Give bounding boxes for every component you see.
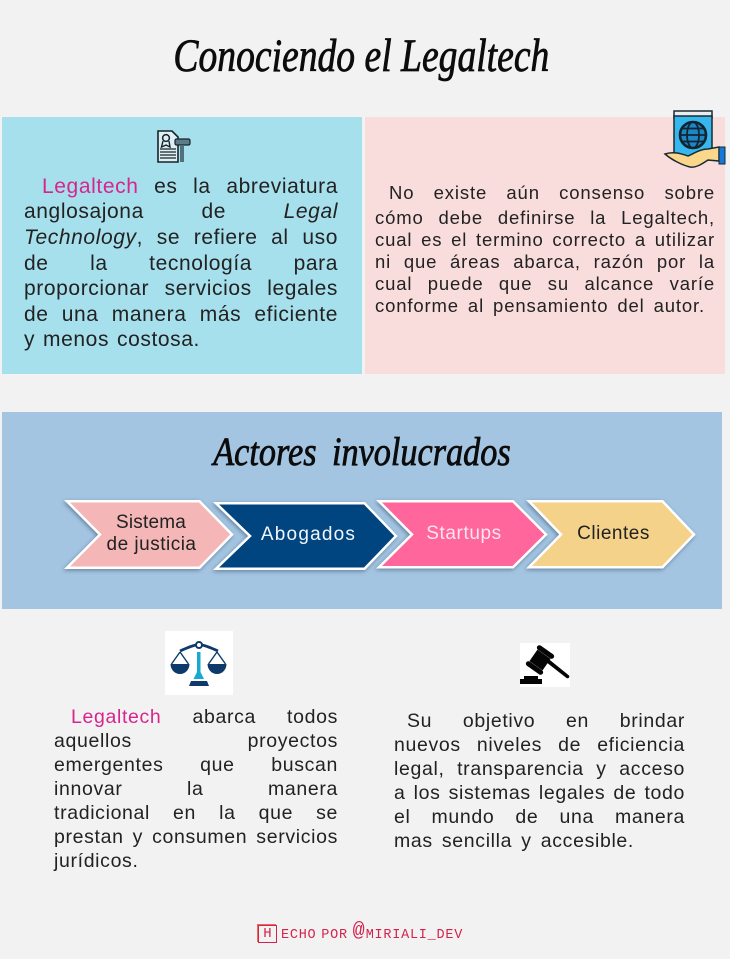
text: definition: Legaltech es la abreviatura bbox=[42, 175, 338, 198]
chevron: clientes: Clientes bbox=[577, 523, 650, 544]
chevron: startups: Startups bbox=[426, 523, 502, 544]
text: definition bbox=[24, 175, 338, 351]
panel: definition bbox=[2, 117, 362, 374]
text: legaltech projects: innovar la manera bbox=[54, 778, 338, 800]
panel: actors band bbox=[2, 412, 722, 609]
chevron: sistema de justicia bbox=[67, 501, 232, 568]
text: definition: anglosajona de Legal bbox=[24, 200, 338, 223]
text: objective: Su objetivo en brindar bbox=[407, 710, 685, 732]
chevron: clientes bbox=[529, 501, 694, 567]
icon: gavel bbox=[520, 643, 570, 687]
text: no consensus: cómo debe definirse la Legaltech, bbox=[375, 207, 715, 228]
text: legaltech projects bbox=[54, 706, 338, 872]
icon: scales of justice bbox=[165, 631, 233, 695]
text: objective: mas sencilla y accesible. bbox=[394, 830, 634, 852]
text: no consensus: conforme al pensamiento del autor. bbox=[375, 295, 705, 316]
chevron: sistema de justicia: Sistema bbox=[116, 512, 186, 533]
text: objective bbox=[394, 710, 685, 852]
footer text: ECHO POR @MIRIALI_DEV bbox=[281, 920, 463, 943]
footer credit bbox=[257, 920, 463, 943]
icon: legal document with gavel bbox=[157, 130, 191, 163]
text: objective: el mundo de una manera bbox=[394, 806, 685, 828]
text: objective: a los sistemas legales de todo bbox=[394, 782, 685, 804]
text: objective: nuevos niveles de eficiencia bbox=[394, 734, 685, 756]
text: no consensus: No existe aún consenso sobre bbox=[389, 182, 715, 203]
text: legaltech projects: tradicional en la que se bbox=[54, 802, 338, 824]
text: no consensus: ni que áreas abarca, razón por la bbox=[375, 251, 715, 272]
chevron: abogados bbox=[216, 503, 396, 569]
text: definition: de una manera más eficiente bbox=[24, 303, 338, 326]
text: no consensus bbox=[375, 182, 715, 316]
text: definition: proporcionar servicios legales bbox=[24, 277, 338, 300]
icon: H cube: H bbox=[263, 926, 272, 942]
chevron process bbox=[62, 499, 696, 574]
chevron: abogados: Abogados bbox=[261, 524, 356, 545]
text: definition: de la tecnología para bbox=[24, 252, 338, 275]
icon: hand holding globe book bbox=[664, 110, 726, 168]
title: Conociendo el Legaltech bbox=[173, 30, 549, 82]
text: legaltech projects: emergentes que buscan bbox=[54, 754, 338, 776]
text: legaltech projects: jurídicos. bbox=[54, 850, 139, 872]
text: no consensus: cual es el termino correcto a utilizar bbox=[375, 229, 715, 250]
panel: no consensus bbox=[365, 117, 725, 374]
text: legaltech projects: aquellos proyectos bbox=[54, 730, 338, 752]
text: definition: y menos costosa. bbox=[24, 328, 200, 351]
chevron: startups bbox=[379, 501, 546, 567]
text: no consensus: cual puede que su alcance varíe bbox=[375, 273, 715, 294]
text: legaltech projects: prestan y consumen servicios bbox=[54, 826, 338, 848]
text: definition: Technology, se refiere al uso bbox=[24, 226, 338, 249]
text: objective: legal, transparencia y acceso bbox=[394, 758, 685, 780]
chevron: sistema de justicia: de justicia bbox=[106, 534, 196, 555]
heading: actors: Actores involucrados bbox=[213, 429, 511, 474]
text: legaltech projects: Legaltech abarca todos bbox=[71, 706, 338, 728]
icon: H cube bbox=[258, 925, 277, 943]
